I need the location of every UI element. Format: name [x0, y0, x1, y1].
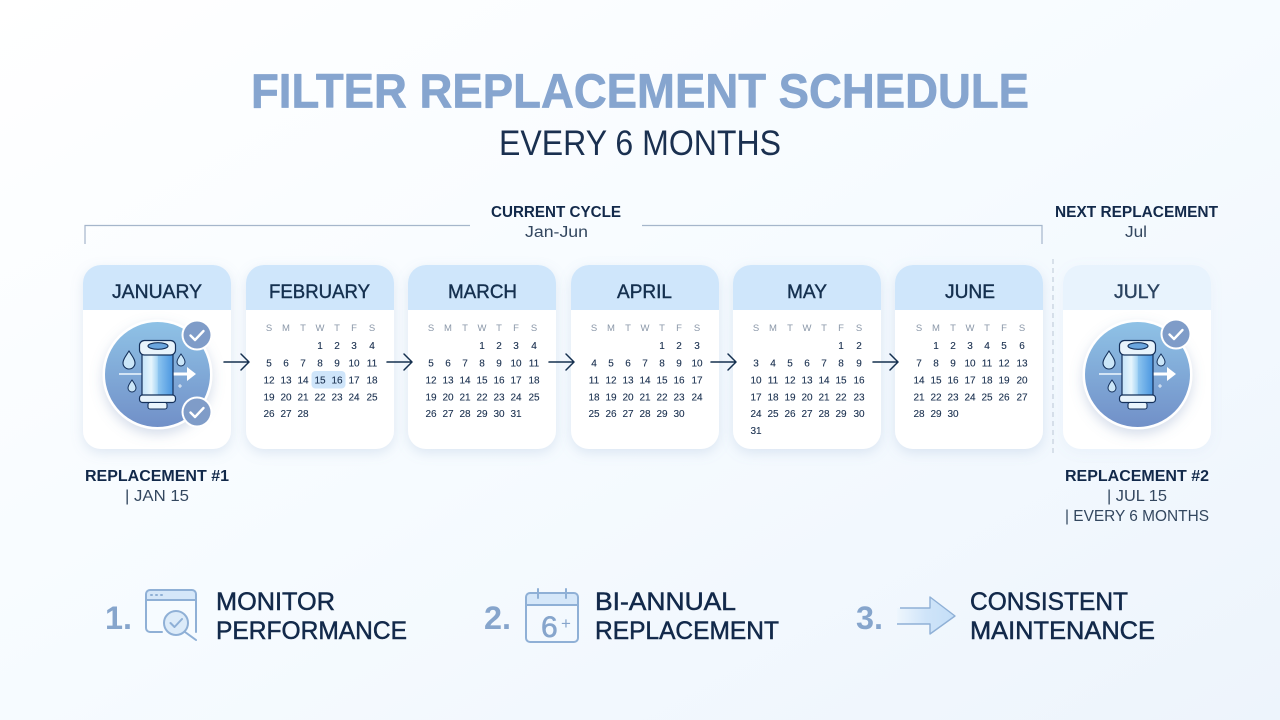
calendar: june: F [1001, 323, 1007, 334]
calendar: may: 27 [801, 409, 813, 420]
calendar: may: 9 [856, 358, 862, 370]
calendar: june: 27 [1016, 392, 1028, 404]
calendar: march: S [428, 323, 434, 334]
calendar: june: 28 [913, 409, 925, 420]
calendar: may: M [769, 323, 777, 334]
panel: january: JANUARY [112, 282, 202, 303]
calendar: march: 17 [510, 376, 522, 386]
calendar: february: 17 [348, 376, 360, 386]
calendar: february [263, 323, 378, 420]
calendar: february: 3 [351, 341, 357, 352]
calendar: april: 9 [676, 358, 682, 370]
calendar: february: 7 [300, 358, 306, 370]
calendar: march: 25 [528, 392, 540, 404]
calendar: april: 25 [588, 409, 600, 420]
calendar: june: 5 [1001, 341, 1007, 352]
calendar: february: 4 [369, 341, 375, 352]
icon: calendar 6+: 6 [541, 611, 558, 644]
calendar: may: 22 [835, 392, 847, 404]
panel: april: APRIL [617, 282, 672, 303]
calendar: may: 18 [767, 392, 779, 404]
calendar: june: 14 [913, 376, 925, 386]
calendar: march: 27 [442, 409, 454, 420]
arrow: april to may [711, 354, 736, 370]
caption: replacement 2: | EVERY 6 MONTHS [1065, 508, 1209, 525]
calendar: june: T [950, 323, 956, 334]
calendar: may: 2 [856, 341, 862, 352]
caption: replacement 2 [1065, 468, 1209, 525]
calendar: may: 12 [784, 376, 796, 386]
calendar: april: 7 [642, 358, 648, 370]
calendar: march: T [496, 323, 502, 334]
calendar: march: 15 [476, 376, 488, 386]
calendar: may: T [821, 323, 827, 334]
calendar: april: 10 [691, 358, 703, 370]
calendar: june: 18 [981, 376, 993, 386]
calendar: february: 13 [280, 376, 292, 386]
calendar: april: 22 [656, 392, 668, 404]
calendar: may: 19 [784, 392, 796, 404]
calendar: june: 22 [930, 392, 942, 404]
calendar: april: 23 [673, 392, 685, 404]
icon: arrow [897, 597, 955, 634]
calendar: march: 28 [459, 409, 471, 420]
calendar: march: 10 [510, 358, 522, 370]
calendar: may: 5 [787, 358, 793, 370]
calendar: may: 24 [750, 409, 762, 420]
calendar: march: 31 [510, 409, 522, 420]
calendar: march: 4 [531, 341, 537, 352]
calendar: june: 30 [947, 409, 959, 420]
calendar: february: 16 [331, 376, 343, 386]
calendar: february: 8 [317, 358, 323, 370]
calendar: march: W [478, 323, 487, 334]
calendar: february: 23 [331, 392, 343, 404]
calendar: april: 15 [656, 376, 668, 386]
calendar: february: 25 [366, 392, 378, 404]
calendar: june: 19 [998, 376, 1010, 386]
icon: filter cartridge [102, 320, 212, 430]
calendar: march: 29 [476, 409, 488, 420]
calendar: june: 24 [964, 392, 976, 404]
calendar: march: 16 [493, 376, 505, 386]
calendar: june: 13 [1016, 358, 1028, 370]
calendar: june: 4 [984, 341, 990, 352]
calendar: may: 31 [750, 426, 762, 437]
calendar: february: 11 [367, 358, 378, 370]
calendar: june: 9 [950, 358, 956, 370]
calendar: may: 8 [838, 358, 844, 370]
label: next replacement: NEXT REPLACEMENT [1055, 204, 1219, 221]
calendar: february: M [282, 323, 290, 334]
highlight: feb 15-16 [312, 371, 346, 388]
caption: replacement 2: | JUL 15 [1107, 488, 1167, 505]
calendar: february: 19 [263, 392, 275, 404]
calendar: may: 23 [853, 392, 865, 404]
calendar: may: W [803, 323, 812, 334]
calendar: april: 4 [591, 358, 597, 370]
calendar: march: 1 [479, 341, 485, 352]
calendar: april: 8 [659, 358, 665, 370]
calendar: march: 23 [493, 392, 505, 404]
calendar: february: 22 [314, 392, 326, 404]
caption: replacement 2: REPLACEMENT #2 [1065, 468, 1209, 485]
calendar: june: 17 [964, 376, 976, 386]
calendar: may: 3 [753, 358, 759, 370]
divider: next cycle [1052, 259, 1054, 457]
step 2: bi-annual replacement: 2. [484, 600, 511, 636]
icon: check top [182, 320, 212, 350]
calendar: may: 15 [835, 376, 847, 386]
calendar: march: T [462, 323, 468, 334]
panel: march: MARCH [448, 282, 517, 303]
icon: calendar 6+: + [561, 614, 571, 633]
calendar: april: 2 [676, 341, 682, 352]
calendar: april: 29 [656, 409, 668, 420]
calendar: february: S [369, 323, 375, 334]
label: current cycle range: Jan-Jun [525, 224, 588, 241]
calendar: march: 5 [428, 358, 434, 370]
calendar: june: 15 [930, 376, 942, 386]
calendar: april: S [591, 323, 597, 334]
calendar: may: 1 [838, 341, 844, 352]
calendar: march: 9 [496, 358, 502, 370]
step 1: monitor performance: 1. [105, 600, 132, 636]
step 3: consistent maintenance: CONSISTENT [970, 588, 1128, 616]
calendar: february: T [334, 323, 340, 334]
calendar: june: 10 [964, 358, 976, 370]
calendar: february: 2 [334, 341, 340, 352]
step 2: bi-annual replacement: REPLACEMENT [595, 617, 779, 645]
arrow: february to march [387, 354, 412, 370]
caption: replacement 1: REPLACEMENT #1 [85, 468, 229, 485]
calendar: april: 1 [659, 341, 665, 352]
calendar: june: 2 [950, 341, 956, 352]
calendar: april: 21 [639, 392, 651, 404]
calendar: april: 19 [605, 392, 617, 404]
calendar: april: 27 [622, 409, 634, 420]
calendar: march: 3 [513, 341, 519, 352]
calendar: may: 30 [853, 409, 865, 420]
calendar: march: 26 [425, 409, 437, 420]
calendar: april: 24 [691, 392, 703, 404]
calendar: february: 20 [280, 392, 292, 404]
step 3: consistent maintenance: MAINTENANCE [970, 617, 1155, 645]
bracket: current cycle [85, 226, 1042, 244]
step 1: monitor performance: PERFORMANCE [216, 617, 407, 645]
icon: check [1160, 318, 1192, 350]
calendar: may: 14 [818, 376, 830, 386]
calendar: june: 23 [947, 392, 959, 404]
calendar: april: 26 [605, 409, 617, 420]
calendar: april: 12 [605, 376, 617, 386]
calendar: april: 13 [622, 376, 634, 386]
panel: july: JULY [1114, 282, 1160, 303]
calendar: may: 28 [818, 409, 830, 420]
calendar: february: 21 [297, 392, 309, 404]
caption: replacement 1: | JAN 15 [125, 488, 189, 505]
calendar: may: 10 [750, 376, 762, 386]
calendar: february: 10 [348, 358, 360, 370]
arrow: may to june [873, 354, 898, 370]
panel: march [408, 265, 556, 449]
panel: june: JUNE [945, 282, 995, 303]
calendar: february: T [300, 323, 306, 334]
calendar: june: 3 [967, 341, 973, 352]
calendar: february: 14 [297, 376, 309, 386]
calendar: june: 29 [930, 409, 942, 420]
calendar: may: S [753, 323, 759, 334]
calendar: may: 26 [784, 409, 796, 420]
panel: february: FEBRUARY [269, 282, 370, 303]
panel: january [83, 265, 231, 449]
calendar: april: 17 [691, 376, 703, 386]
step 3: consistent maintenance [856, 588, 1155, 645]
calendar: march: 14 [459, 376, 471, 386]
calendar: may: 29 [835, 409, 847, 420]
label: next replacement month: Jul [1125, 224, 1147, 241]
caption: replacement 1 [85, 468, 229, 505]
calendar: may: 25 [767, 409, 779, 420]
calendar: may: 21 [818, 392, 830, 404]
calendar: june: 1 [933, 341, 939, 352]
icon: filter cartridge [1082, 320, 1192, 430]
calendar: may: 17 [750, 392, 762, 404]
calendar: june: 20 [1016, 376, 1028, 386]
calendar: april: 16 [673, 376, 685, 386]
calendar: march: 30 [493, 409, 505, 420]
calendar: march: M [444, 323, 452, 334]
calendar: june: 21 [913, 392, 925, 404]
panel: may: MAY [787, 282, 827, 303]
panel: july [1063, 265, 1211, 449]
calendar: february: W [316, 323, 325, 334]
calendar: february: 26 [263, 409, 275, 420]
calendar: april: 30 [673, 409, 685, 420]
calendar: april: T [625, 323, 631, 334]
calendar: june: 8 [933, 358, 939, 370]
title: FILTER REPLACEMENT SCHEDULE [251, 66, 1029, 118]
calendar: march: 8 [479, 358, 485, 370]
calendar: february: 28 [297, 409, 309, 420]
label: current cycle: CURRENT CYCLE [491, 204, 621, 221]
calendar: june: 7 [916, 358, 922, 370]
calendar: may: 4 [770, 358, 776, 370]
calendar: june: S [1019, 323, 1025, 334]
calendar: april: 11 [589, 376, 600, 386]
calendar: march: 12 [425, 376, 437, 386]
arrow: march to april [549, 354, 574, 370]
calendar: february: 9 [334, 358, 340, 370]
calendar: april: T [659, 323, 665, 334]
panel: february [246, 265, 394, 449]
calendar: february: 18 [366, 376, 378, 386]
calendar: april [588, 323, 703, 420]
calendar: june: T [984, 323, 990, 334]
calendar: june: 12 [998, 358, 1010, 370]
calendar: april: 6 [625, 358, 631, 370]
calendar: february: 12 [263, 376, 275, 386]
calendar: march: 21 [459, 392, 471, 404]
calendar: march: 20 [442, 392, 454, 404]
step 1: monitor performance [105, 588, 407, 645]
calendar: march: 7 [462, 358, 468, 370]
calendar: april: 20 [622, 392, 634, 404]
calendar: february: 6 [283, 358, 289, 370]
calendar: march: 6 [445, 358, 451, 370]
step 3: consistent maintenance: 3. [856, 600, 883, 636]
calendar: may: 20 [801, 392, 813, 404]
calendar: may: 7 [821, 358, 827, 370]
calendar: may: 11 [768, 376, 779, 386]
calendar: may [750, 323, 865, 437]
calendar: march: 2 [496, 341, 502, 352]
calendar: february: S [266, 323, 272, 334]
calendar: may: T [787, 323, 793, 334]
calendar: april: 18 [588, 392, 600, 404]
calendar: may: 16 [853, 376, 865, 386]
icon: calendar 6+ [526, 589, 578, 644]
calendar: february: 24 [348, 392, 360, 404]
calendar: april: S [694, 323, 700, 334]
arrow: january to february [224, 354, 249, 370]
calendar: march: F [513, 323, 519, 334]
calendar: may: 6 [804, 358, 810, 370]
calendar: june: M [932, 323, 940, 334]
calendar: march: 24 [510, 392, 522, 404]
calendar: march: 18 [528, 376, 540, 386]
calendar: june: 25 [981, 392, 993, 404]
calendar: march: 13 [442, 376, 454, 386]
calendar: june: S [916, 323, 922, 334]
calendar: february: F [351, 323, 357, 334]
calendar: march [425, 323, 540, 420]
calendar: june: 6 [1019, 341, 1025, 352]
calendar: march: S [531, 323, 537, 334]
icon: monitor window with magnifier [146, 590, 196, 640]
calendar: april: 28 [639, 409, 651, 420]
panel: june [895, 265, 1043, 449]
step 1: monitor performance: MONITOR [216, 588, 335, 616]
calendar: march: 19 [425, 392, 437, 404]
panel: april [571, 265, 719, 449]
subtitle: EVERY 6 MONTHS [499, 124, 781, 163]
calendar: june: 16 [947, 376, 959, 386]
calendar: march: 11 [529, 358, 540, 370]
calendar: february: 1 [317, 341, 323, 352]
calendar: june: W [966, 323, 975, 334]
calendar: february: 27 [280, 409, 292, 420]
calendar: may: 13 [801, 376, 813, 386]
calendar: june [913, 323, 1028, 420]
calendar: april: F [676, 323, 682, 334]
calendar: april: 14 [639, 376, 651, 386]
calendar: may: F [838, 323, 844, 334]
calendar: february: 5 [266, 358, 272, 370]
step 2: bi-annual replacement [484, 588, 779, 645]
calendar: march: 22 [476, 392, 488, 404]
calendar: april: W [641, 323, 650, 334]
calendar: february: 15 [314, 376, 326, 386]
icon: check bottom [182, 396, 212, 428]
step 2: bi-annual replacement: BI-ANNUAL [595, 588, 736, 616]
calendar: april: M [607, 323, 615, 334]
calendar: april: 3 [694, 341, 700, 352]
calendar: june: 26 [998, 392, 1010, 404]
panel: may [733, 265, 881, 449]
calendar: april: 5 [608, 358, 614, 370]
calendar: june: 11 [982, 358, 993, 370]
calendar: may: S [856, 323, 862, 334]
